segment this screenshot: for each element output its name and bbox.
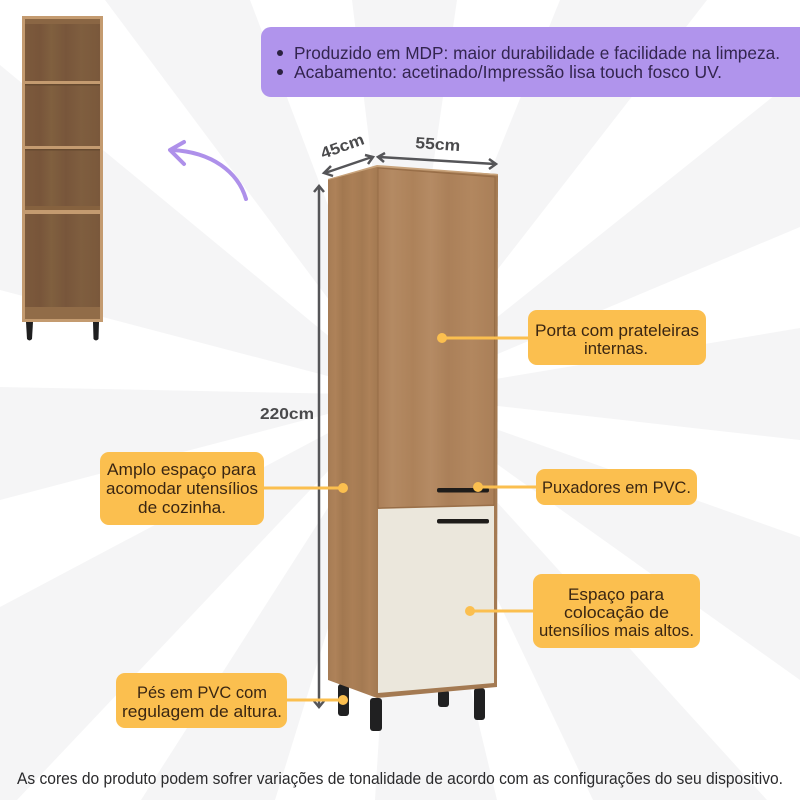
main cabinet [328, 165, 498, 731]
panel: product features: Acabamento: acetinado/Impressão lisa touch fosco UV. [294, 62, 722, 82]
height dimension 220cm: 220cm [260, 406, 314, 423]
callout: tall utensils space: utensílios mais altos. [539, 621, 694, 640]
callout: PVC feet: regulagem de altura. [122, 702, 282, 721]
panel: product features: Produzido em MDP: maior durabilidade e facilidade na limpeza. [294, 43, 780, 63]
height dimension 220cm [260, 186, 324, 707]
lower cream door [378, 506, 494, 693]
callout: PVC handles: Puxadores em PVC. [542, 478, 691, 497]
open cabinet product image [22, 16, 103, 340]
callout: door with shelves: internas. [584, 339, 648, 358]
callout: ample storage [100, 452, 348, 525]
door handles [437, 488, 489, 492]
callout: ample storage: Amplo espaço para [107, 460, 257, 479]
callout: door with shelves [437, 310, 706, 365]
callout: tall utensils space [465, 574, 700, 648]
curved purple arrow [170, 142, 246, 199]
cabinet feet [338, 684, 485, 731]
callout: tall utensils space: Espaço para [568, 585, 665, 604]
width dimension 55cm: 55cm [415, 135, 461, 155]
upper wood door [378, 168, 495, 508]
width dimension 55cm [378, 135, 496, 169]
callout: door with shelves: Porta com prateleiras [535, 321, 699, 340]
depth dimension 45cm [319, 131, 373, 176]
depth dimension 45cm: 45cm [319, 131, 367, 163]
panel: product features [261, 27, 800, 97]
callout: PVC feet [116, 673, 348, 728]
callout: PVC feet: Pés em PVC com [137, 683, 267, 702]
callout: ample storage: acomodar utensílios [106, 479, 258, 498]
callout: tall utensils space: colocação de [564, 603, 669, 622]
callout: ample storage: de cozinha. [138, 498, 226, 517]
callout: PVC handles [473, 469, 697, 505]
